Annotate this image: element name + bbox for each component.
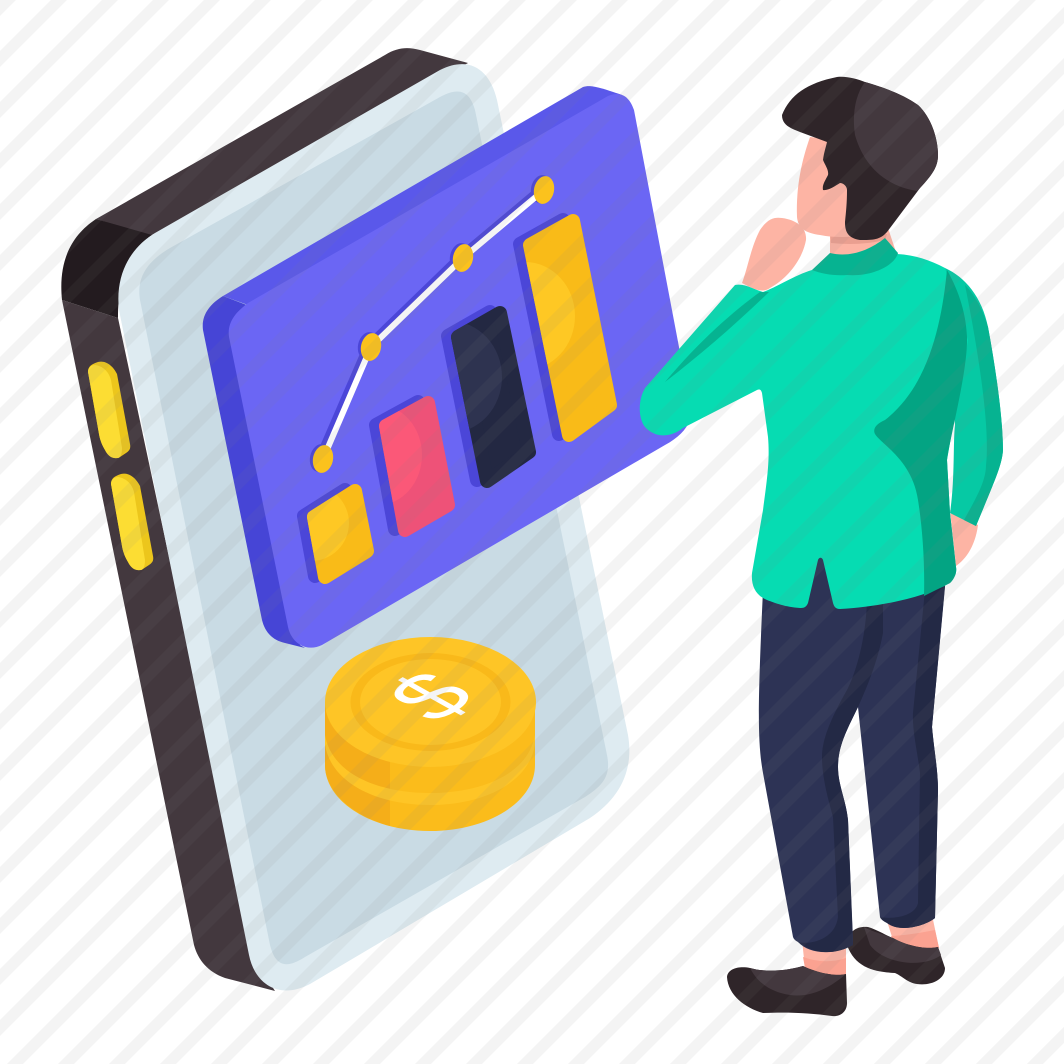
front ankle bbox=[802, 940, 846, 976]
bar tall yellow bbox=[523, 214, 618, 442]
face bbox=[797, 137, 870, 237]
phone glass front bbox=[118, 64, 629, 991]
side button upper bbox=[88, 362, 130, 458]
coin ring bbox=[350, 653, 510, 751]
front shoe bbox=[727, 966, 847, 1016]
phone corner bbox=[61, 219, 152, 318]
man bbox=[640, 77, 1003, 1016]
rear hand bbox=[950, 510, 978, 566]
bar small yellow bbox=[306, 484, 374, 584]
hair highlight bbox=[854, 82, 938, 191]
side button lower bbox=[111, 474, 153, 570]
line chart bbox=[323, 190, 544, 459]
panel top edge bbox=[223, 86, 622, 305]
phone inner screen bbox=[139, 91, 608, 964]
arm fold bbox=[665, 292, 769, 382]
chart panel bbox=[203, 86, 690, 648]
panel side bbox=[203, 296, 305, 648]
trouser crease shading bbox=[798, 600, 883, 952]
data points bbox=[310, 174, 557, 475]
dollar sign: $ bbox=[366, 658, 496, 735]
coin light band bbox=[325, 735, 535, 805]
shirt shadow bbox=[874, 270, 967, 596]
coin top face bbox=[325, 637, 536, 767]
coin shaded left bbox=[325, 702, 390, 826]
rear ankle bbox=[885, 915, 939, 948]
trousers bbox=[759, 540, 946, 952]
thinking hand bbox=[742, 218, 806, 290]
coin body bbox=[325, 702, 535, 831]
phone top edge bbox=[96, 48, 468, 236]
hair bbox=[782, 77, 938, 240]
bar shadows bbox=[304, 220, 600, 576]
rear shoe bbox=[847, 927, 945, 984]
bar pink bbox=[379, 396, 455, 537]
coin stack bbox=[325, 637, 536, 831]
panel face bbox=[229, 94, 690, 648]
phone left side bbox=[62, 300, 275, 991]
shirt body and arm bbox=[640, 254, 968, 609]
neck bbox=[830, 228, 897, 262]
line chart shadow bbox=[307, 173, 554, 474]
phone bbox=[61, 48, 629, 991]
collar bbox=[812, 238, 898, 275]
bar black bbox=[451, 306, 536, 488]
right sleeve bbox=[945, 268, 1003, 526]
